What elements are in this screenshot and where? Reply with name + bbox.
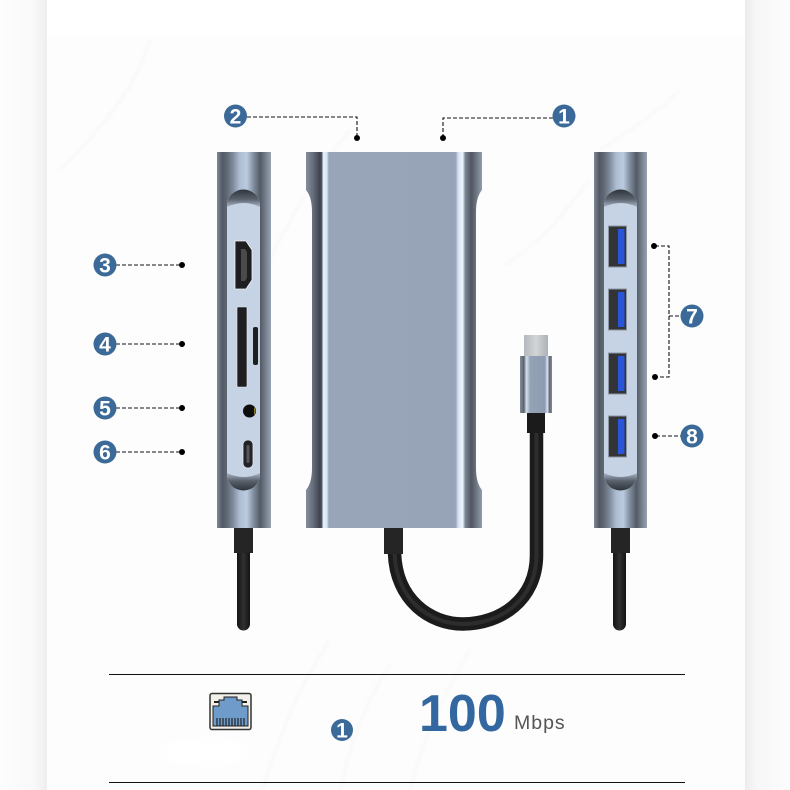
main hub body [306, 152, 482, 528]
SD card slot [237, 307, 247, 387]
cable between main body and connector [384, 425, 536, 624]
USB-C port [243, 440, 253, 468]
left side view of hub [217, 152, 271, 630]
callout 1 [440, 104, 576, 141]
left stub cable [234, 528, 253, 630]
USB port 1 [608, 226, 626, 267]
USB port 4 [608, 416, 626, 457]
callout 6: 6 [99, 442, 111, 464]
callout 5 [94, 396, 185, 420]
row number badge 1: 1 [336, 720, 348, 742]
audio jack [243, 404, 256, 418]
callout 4: 4 [99, 334, 111, 356]
right stub cable [611, 528, 630, 630]
right side view of hub [594, 152, 647, 630]
microSD slot [253, 327, 258, 365]
left port plate [227, 190, 260, 490]
callout 8 [652, 424, 704, 448]
speed value: 100 [419, 685, 506, 743]
callout 5: 5 [99, 398, 111, 420]
white smudge under icon [161, 739, 249, 765]
callout 2 [224, 104, 360, 141]
HDMI port [235, 241, 252, 289]
callout 3 [94, 254, 185, 278]
callout 7: 7 [686, 306, 698, 328]
USB port 3 [608, 353, 626, 394]
USB-C connector [520, 335, 552, 433]
callout 4 [94, 332, 185, 356]
callout 1: 1 [558, 106, 570, 128]
speed value [419, 685, 566, 743]
callout 3: 3 [99, 254, 111, 278]
spec table rules [109, 674, 685, 783]
speed value: Mbps [514, 712, 566, 734]
callout 2: 2 [230, 106, 241, 128]
callout 7 [651, 243, 704, 380]
right port plate [604, 190, 637, 490]
icon: ethernet port [210, 694, 251, 730]
callout 6 [94, 440, 185, 464]
callout 8: 8 [686, 426, 698, 448]
row number badge 1 [331, 719, 353, 742]
USB port 2 [608, 289, 626, 330]
